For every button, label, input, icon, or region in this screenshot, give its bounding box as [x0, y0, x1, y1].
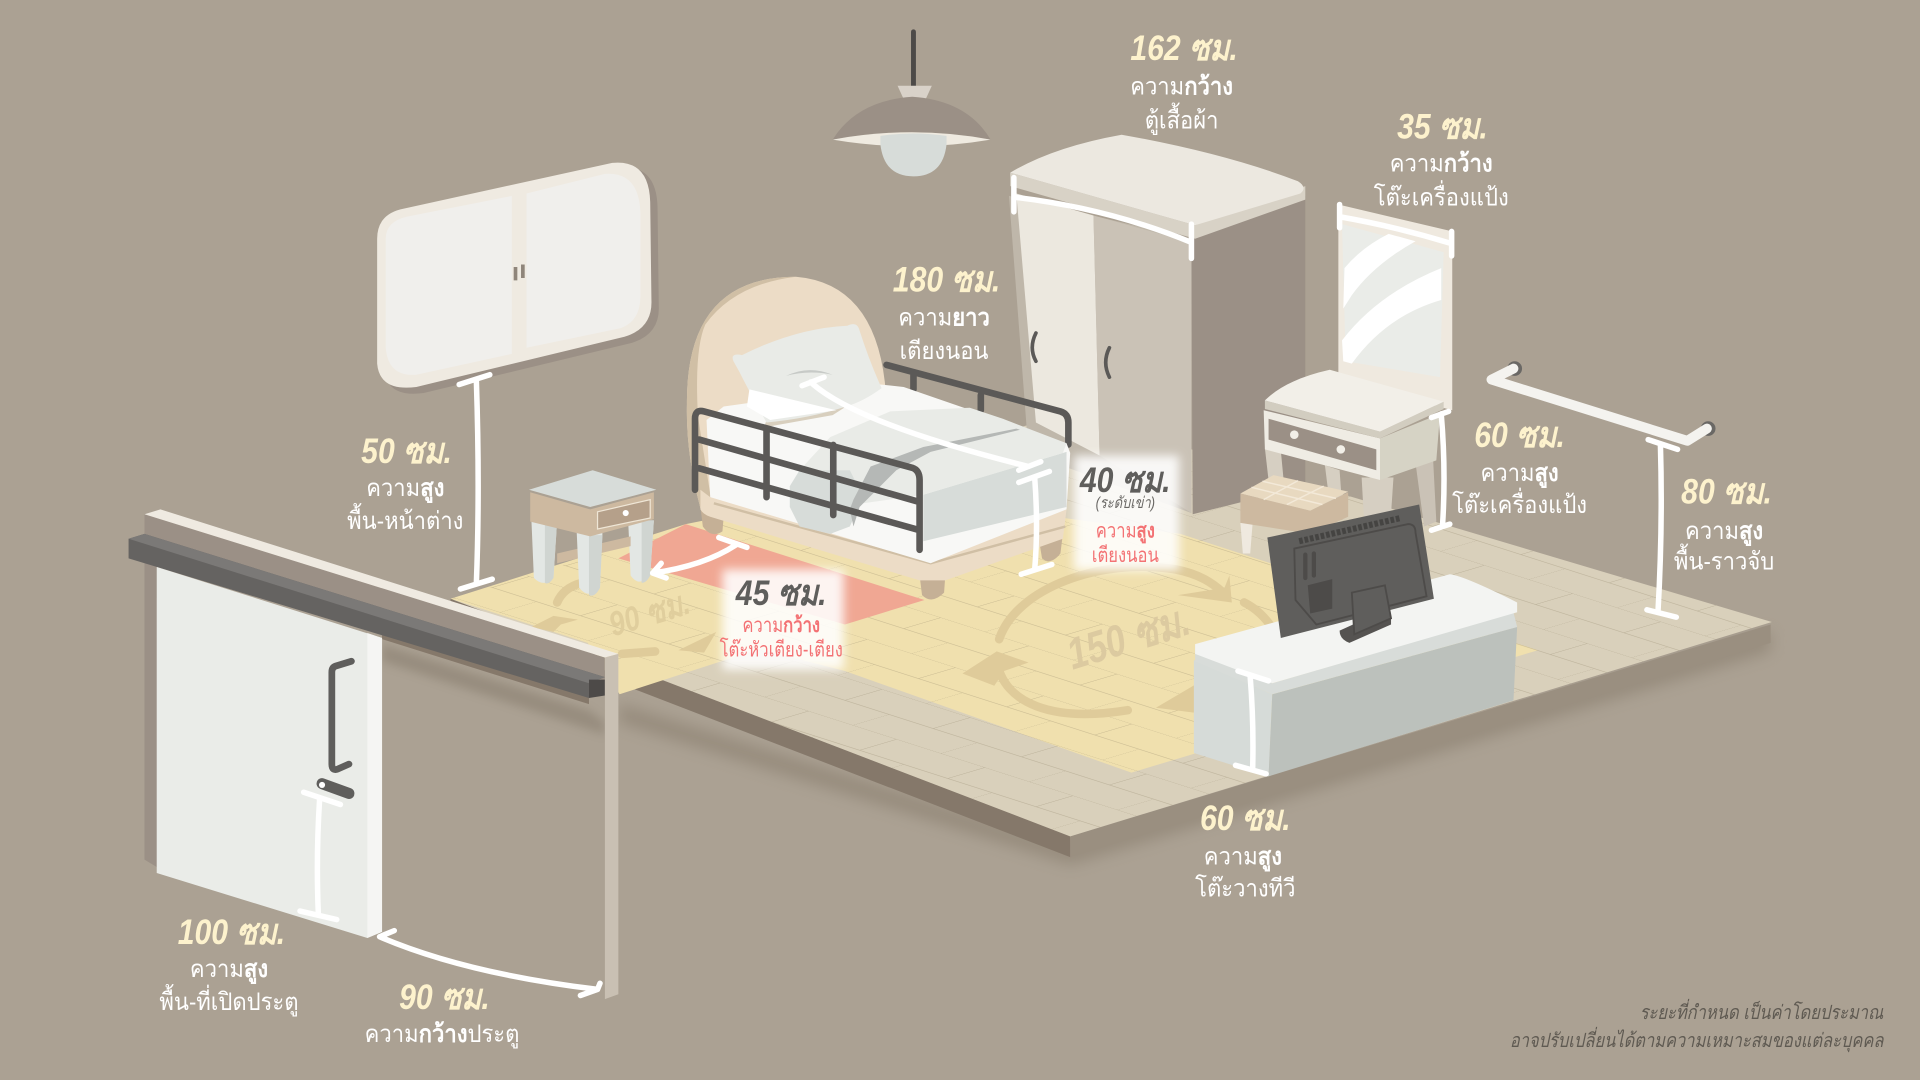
label: door handle height: พื้น-ที่เปิดประตู — [159, 984, 299, 1018]
label: wardrobe width: ตู้เสื้อผ้า — [1145, 102, 1219, 136]
dimension marker: bedside gap — [653, 538, 747, 578]
label: door width — [365, 977, 519, 1049]
nightstand — [529, 470, 656, 596]
label: bedside gap: ความกว้าง — [742, 613, 820, 636]
label: mirror width: 35 ซม. — [1397, 106, 1488, 146]
label: wardrobe width: ความกว้าง — [1130, 72, 1233, 100]
label: TV table height: ความสูง — [1204, 842, 1282, 872]
dimension marker: dresser height — [1431, 411, 1450, 530]
label: TV table height: โต๊ะวางทีวี — [1195, 874, 1295, 902]
stool — [1240, 475, 1348, 553]
label: TV table height — [1195, 798, 1295, 902]
label: window height: ความสูง — [366, 474, 444, 503]
label: wardrobe width — [1130, 28, 1238, 136]
pillow — [733, 324, 882, 427]
footnote: ระยะที่กำหนด เป็นค่าโดยประมาณ — [1640, 998, 1884, 1023]
footnote — [1510, 998, 1884, 1052]
dimension marker: bed length — [802, 377, 1041, 470]
door frame left — [144, 539, 157, 867]
bed base — [700, 490, 1067, 580]
label: grab bar height: พื้น-ราวจับ — [1674, 543, 1774, 575]
drawer — [1269, 419, 1376, 470]
dimension marker: window height — [459, 375, 492, 589]
label: wardrobe width: 162 ซม. — [1130, 28, 1238, 68]
headboard — [687, 277, 887, 514]
door latch — [319, 782, 349, 793]
label: mirror width — [1374, 106, 1509, 211]
door handle — [332, 661, 351, 770]
label: door handle height: 100 ซม. — [178, 912, 285, 952]
lip under rail — [382, 632, 589, 704]
floor platform — [451, 413, 1772, 864]
turning circle 90 cm: 90 ซม. — [604, 583, 694, 644]
label: window height — [347, 431, 463, 534]
label: mirror width: ความกว้าง — [1390, 149, 1493, 177]
label: bed length: ความยาว — [898, 304, 990, 331]
turning circle 90 cm — [531, 583, 716, 654]
dimension marker: mirror width — [1340, 204, 1452, 256]
label: door handle height — [159, 912, 299, 1018]
blanket — [790, 408, 1067, 541]
bed legs — [700, 507, 724, 534]
dimension marker: door width — [380, 931, 600, 996]
wardrobe — [1009, 135, 1305, 514]
label: bed height: ความสูง — [1096, 519, 1155, 544]
label: bed height: (ระดับเข่า) — [1096, 495, 1155, 513]
label: dresser height: 60 ซม. — [1474, 415, 1565, 454]
dimension marker: grab bar height — [1647, 440, 1678, 617]
label: bed height — [1079, 460, 1171, 566]
label: mirror width: โต๊ะเครื่องแป้ง — [1374, 180, 1509, 211]
dresser legs — [1265, 448, 1286, 502]
mirror — [1338, 204, 1452, 410]
label: door width: 90 ซม. — [399, 977, 490, 1017]
red bedside mat — [618, 524, 924, 624]
label: bed length — [893, 259, 1000, 364]
dresser body — [1264, 410, 1380, 480]
TV — [1267, 504, 1434, 643]
soft label box: 40 cm — [1074, 456, 1179, 571]
soft label box: 45 cm — [722, 569, 844, 670]
label: dresser height — [1452, 415, 1587, 518]
label: bedside gap — [720, 573, 843, 661]
label: grab bar height: 80 ซม. — [1681, 471, 1772, 511]
top trim — [144, 509, 618, 658]
dimension marker: TV table height — [1236, 671, 1269, 774]
back rail — [887, 365, 1068, 444]
grab bar — [1491, 361, 1716, 441]
pendant lamp — [833, 32, 991, 176]
label: bedside gap: 45 ซม. — [735, 573, 826, 612]
label: bed height: 40 ซม. — [1079, 460, 1171, 500]
label: grab bar height: ความสูง — [1685, 517, 1763, 546]
bed — [687, 277, 1070, 599]
dimension marker: wardrobe width — [1014, 178, 1191, 258]
label: window height: 50 ซม. — [361, 431, 452, 470]
rail — [129, 534, 605, 698]
wall shadow below rail — [382, 644, 605, 735]
label: dresser height: ความสูง — [1480, 459, 1559, 489]
label: door handle height: ความสูง — [190, 955, 268, 985]
sliding door and wall — [129, 509, 618, 999]
footnote: อาจปรับเปลี่ยนได้ตามความเหมาะสมของแต่ละบุคคล — [1510, 1026, 1884, 1052]
label: bed length: เตียงนอน — [900, 337, 989, 364]
door panel — [157, 567, 382, 938]
label: bedside gap: โต๊ะหัวเตียง-เตียง — [720, 638, 843, 661]
turning circle 150 cm — [962, 567, 1273, 714]
label: dresser height: โต๊ะเครื่องแป้ง — [1452, 488, 1587, 518]
dimension marker: bed height — [1019, 471, 1052, 574]
TV table — [1194, 504, 1517, 776]
turning circle 150 cm: 150 ซม. — [1061, 596, 1196, 679]
label: TV table height: 60 ซม. — [1200, 798, 1291, 838]
mattress — [707, 384, 1070, 563]
window — [377, 163, 659, 394]
label: door width: ความกว้างประตู — [365, 1020, 519, 1049]
dressing table — [1240, 204, 1452, 553]
label: window height: พื้น-หน้าต่าง — [347, 503, 463, 534]
yellow clearance zone — [451, 490, 1538, 773]
door post — [605, 654, 618, 999]
label: bed length: 180 ซม. — [893, 259, 1000, 299]
dimension marker: door handle height — [300, 792, 340, 920]
label: bed height: เตียงนอน — [1092, 543, 1159, 566]
label: grab bar height — [1674, 471, 1774, 575]
front rail — [695, 411, 920, 550]
